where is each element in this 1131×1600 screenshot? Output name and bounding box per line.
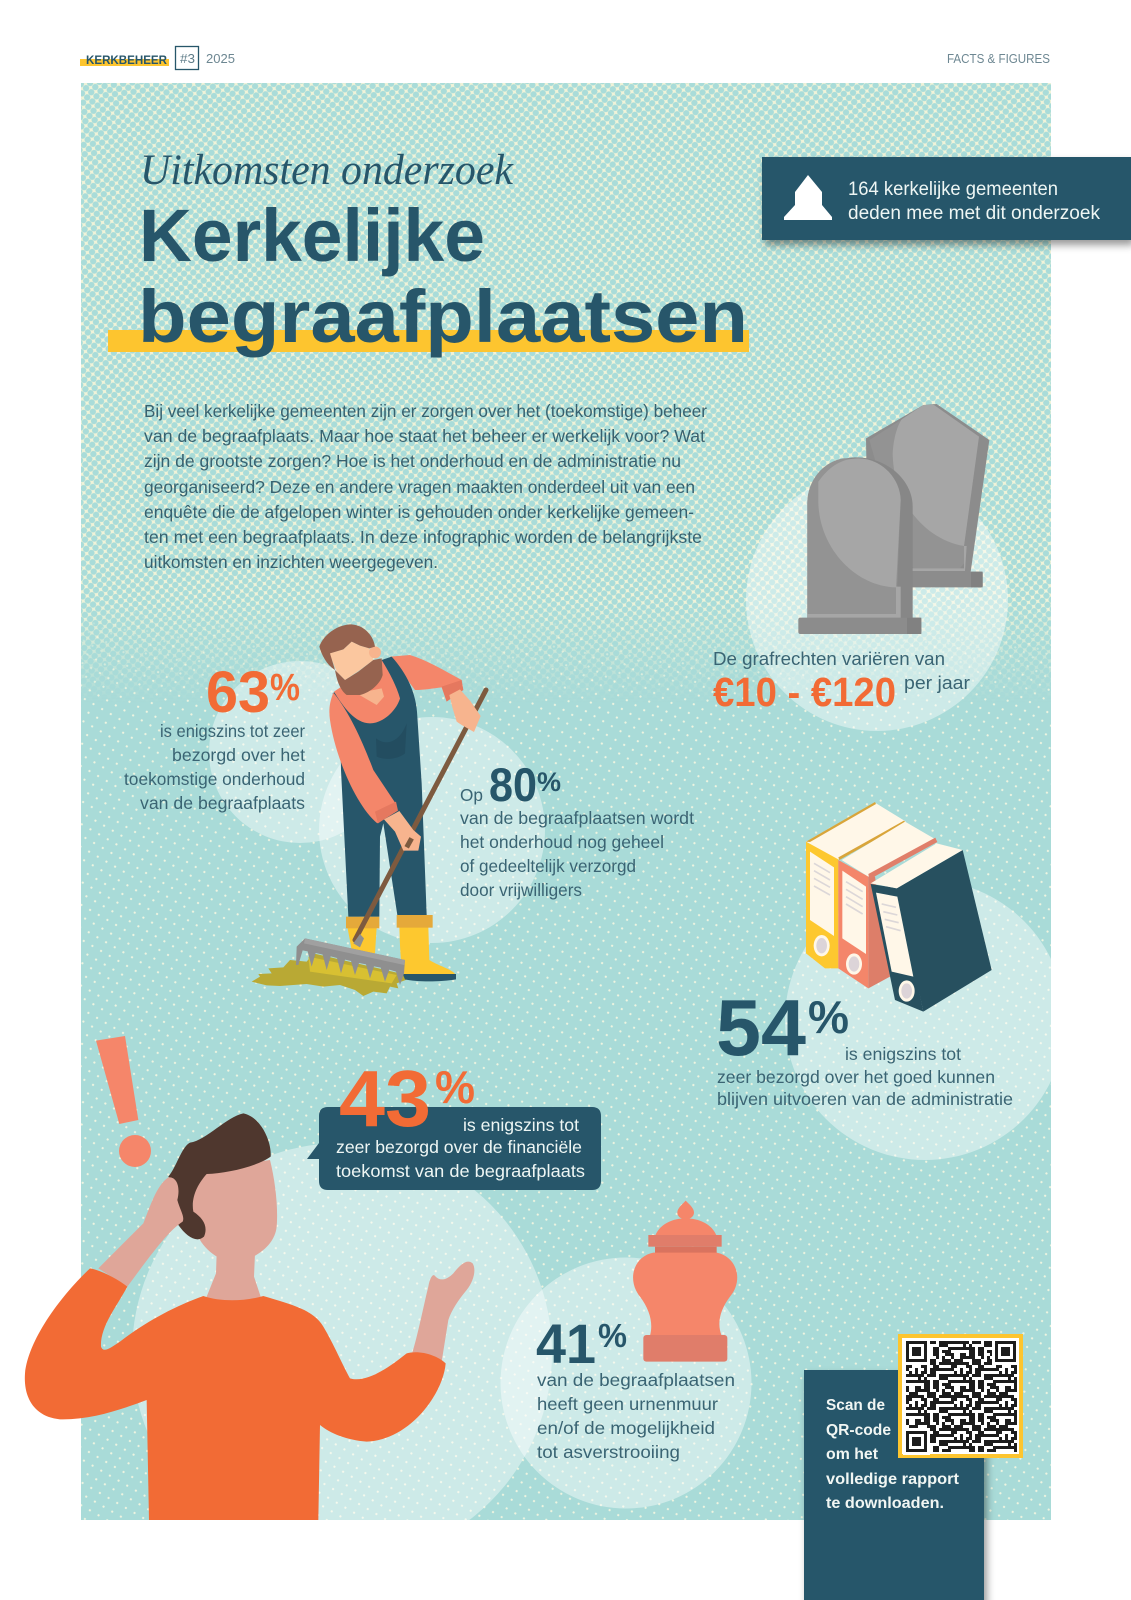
stat: 80 percent: het onderhoud nog geheel xyxy=(460,832,664,852)
stat: 80 percent: Op xyxy=(460,785,483,805)
panel: QR download: Scan de xyxy=(826,1397,885,1414)
stat: 63 percent: % xyxy=(270,667,300,709)
sweater xyxy=(25,1268,446,1520)
rake xyxy=(296,934,405,985)
icon: church xyxy=(784,175,832,220)
speech bubble: 43 percent: is enigszins tot xyxy=(463,1115,579,1135)
stat: 80 percent: 80 xyxy=(489,758,537,811)
intro text block: georganiseerd? Deze en andere vragen maakten onderdeel uit van een xyxy=(144,477,695,497)
stat: 80 percent: van de begraafplaatsen wordt xyxy=(460,808,694,828)
stat: 63 percent: is enigszins tot zeer xyxy=(160,721,305,741)
left arm xyxy=(329,693,397,823)
stat: 63 percent xyxy=(124,660,305,813)
hands xyxy=(384,811,421,851)
stat: 41 percent: tot asverstrooiing xyxy=(537,1442,680,1462)
overalls xyxy=(333,657,427,917)
stat: 54 percent: is enigszins tot xyxy=(845,1044,961,1064)
stat: 54 percent xyxy=(716,983,1013,1109)
header: magazine line: KERKBEHEER xyxy=(86,53,167,67)
neck xyxy=(203,1253,264,1307)
intro text block xyxy=(144,401,707,572)
icon: urn xyxy=(633,1201,737,1362)
stat: 41 percent: 41 xyxy=(536,1312,596,1375)
hay highlight xyxy=(308,957,397,983)
header: magazine line: 2025 xyxy=(206,52,235,66)
callout: participants: 164 kerkelijke gemeenten xyxy=(848,178,1058,200)
title: Kerkelijke xyxy=(139,194,485,277)
stat: 54 percent: % xyxy=(808,991,849,1043)
stat: grave rights: per jaar xyxy=(904,672,970,693)
panel: QR download: om het xyxy=(826,1446,879,1463)
stat: 80 percent: of gedeeltelijk verzorgd xyxy=(460,856,636,876)
stat: 63 percent: bezorgd over het xyxy=(172,745,305,765)
title: Uitkomsten onderzoek xyxy=(140,147,514,194)
stat: grave rights: €10 - €120 xyxy=(713,669,896,715)
open hand arm xyxy=(412,1262,474,1362)
stat: 54 percent: zeer bezorgd over het goed kunnen xyxy=(717,1067,995,1087)
face xyxy=(193,1160,277,1263)
salmon binder xyxy=(838,822,937,988)
stat: 41 percent xyxy=(536,1312,735,1462)
header: magazine line: FACTS & FIGURES xyxy=(947,52,1050,66)
stat: 41 percent: en/of de mogelijkheid xyxy=(537,1418,715,1438)
intro text block: van de begraafplaats. Maar hoe staat het beheer er werkelijk voor? Wat xyxy=(144,426,705,446)
speech bubble: 43 percent: 43 xyxy=(339,1054,431,1143)
speech bubble: 43 percent: % xyxy=(435,1061,475,1113)
stat: 63 percent: 63 xyxy=(206,660,270,725)
icon: binders xyxy=(806,802,992,1012)
title: begraafplaatsen xyxy=(138,275,748,358)
yellow binder xyxy=(806,802,906,968)
panel: QR download: QR-code xyxy=(826,1422,891,1439)
illustration: worried man xyxy=(25,1036,474,1520)
panel: QR download: te downloaden. xyxy=(826,1495,944,1512)
boots xyxy=(346,915,456,981)
stat: 54 percent: 54 xyxy=(716,983,807,1072)
intro text block: uitkomsten en inzichten weergegeven. xyxy=(144,552,438,572)
callout: participants: deden mee met dit onderzoek xyxy=(848,202,1100,224)
speech bubble: 43 percent: zeer bezorgd over de financiële xyxy=(336,1137,582,1157)
stat: grave rights xyxy=(713,648,970,715)
sweater collar xyxy=(334,660,400,723)
rake handle xyxy=(355,690,486,940)
background circles xyxy=(132,469,1065,1563)
navy binder xyxy=(871,843,992,1012)
panel: QR download: volledige rapport xyxy=(826,1471,960,1488)
stat: 54 percent: blijven uitvoeren van de administratie xyxy=(717,1089,1013,1109)
speech bubble: 43 percent xyxy=(307,1054,601,1190)
stat: 41 percent: heeft geen urnenmuur xyxy=(537,1394,718,1414)
stat: grave rights: De grafrechten variëren van xyxy=(713,648,945,669)
stat: 63 percent: van de begraafplaats xyxy=(140,793,305,813)
head xyxy=(319,624,383,695)
stat: 80 percent: % xyxy=(537,767,561,797)
back arm xyxy=(390,655,462,702)
intro text block: Bij veel kerkelijke gemeenten zijn er zorgen over het (toekomstige) beheer xyxy=(144,401,707,421)
exclamation mark xyxy=(96,1036,151,1167)
stat: 41 percent: van de begraafplaatsen xyxy=(537,1370,735,1390)
stat: 41 percent: % xyxy=(598,1317,627,1354)
panel: QR download xyxy=(804,1370,984,1600)
icon: gravestones xyxy=(798,404,989,634)
stat: 63 percent: toekomstige onderhoud xyxy=(124,769,305,789)
neck xyxy=(357,688,384,705)
hay pile xyxy=(252,953,410,996)
header: magazine line xyxy=(80,46,1050,70)
intro text block: ten met een begraafplaats. In deze infographic worden de belangrijkste xyxy=(144,527,702,547)
stat: 80 percent: door vrijwilligers xyxy=(460,880,582,900)
illustration: worker with rake xyxy=(252,624,486,996)
intro text block: zijn de grootste zorgen? Hoe is het onderhoud en de administratie nu xyxy=(144,451,681,471)
panel: textured background xyxy=(81,83,1051,1520)
callout: participants xyxy=(762,157,1131,240)
title xyxy=(108,147,749,358)
QR code xyxy=(900,1336,1021,1456)
header: magazine line: #3 xyxy=(180,52,195,66)
speech bubble: 43 percent: toekomst van de begraafplaats xyxy=(336,1161,585,1181)
hair xyxy=(168,1113,271,1239)
stat: 80 percent xyxy=(460,758,694,900)
raised arm xyxy=(98,1177,183,1287)
intro text block: enquête die de afgelopen winter is gehouden onder kerkelijke gemeen- xyxy=(144,502,694,522)
